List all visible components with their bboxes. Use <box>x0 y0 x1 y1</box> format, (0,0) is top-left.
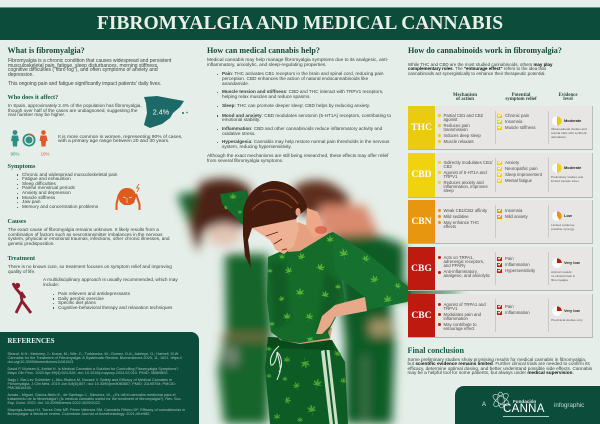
tag: THC: THC <box>411 122 432 133</box>
evidence: low: Limited evidence; <box>551 223 575 227</box>
column header: mechanism of action <box>453 92 477 102</box>
sleeve: right arm <box>333 232 412 310</box>
list: THC mechanisms <box>438 112 483 144</box>
text: multidisciplinary approach: A multidisciplinary approach is usually recommended, which may <box>43 277 178 282</box>
list: cannabis benefits: oxidative stress. <box>222 131 256 136</box>
evidence: very low: Animal models; <box>551 270 572 274</box>
tag: CBD: CBD <box>411 169 432 180</box>
text: conclusion: efficacy, determine optimal dosing, and better understand possible side effects. Cannabis <box>408 366 592 371</box>
text: reference list: Aznán-, Miguel, García-Nieto E., de Santiago J., Sánchez, M., ¿Es útil el cannabis medicinal para el <box>8 393 176 397</box>
list: CBN symptom relief <box>497 208 528 219</box>
list: CBD symptom relief: Anxiety <box>505 160 519 165</box>
list: symptoms: Anxiety and depression <box>22 190 71 195</box>
list: THC mechanisms: transmission <box>444 127 468 132</box>
text: CANNA: CANNA <box>503 403 545 415</box>
text: entourage effect: complementary roles. The "entourage effect" refers to the idea that <box>408 66 546 71</box>
text: reference list: PMC6616435. <box>8 386 32 390</box>
chart: 90/10 donut <box>23 134 35 146</box>
list: CBG symptom relief: Hypersensitivity <box>505 268 535 273</box>
list: THC mechanisms: Muscle relaxant <box>444 139 474 144</box>
text: benefits closing note: from several fibromyalgia symptoms. <box>207 158 283 163</box>
text: definition: Fibromyalgia is a chronic condition that causes widespread and persistent <box>8 58 171 64</box>
text: conclusion: but scientific evidence remains limited. Further clinical trials are needed to confirm its <box>408 361 590 366</box>
text: reference list: Esp. Dolor. 2022. doi: 10.20986/resed.2022.4029/2022. <box>8 401 101 405</box>
list: CBN symptom relief: Mild anxiety <box>505 214 528 219</box>
text: causes <box>8 227 170 246</box>
icon: person exercising <box>12 282 32 314</box>
list: CBD mechanisms: Reduces anxiety and <box>444 180 484 185</box>
arm skin <box>316 297 367 334</box>
text: prevalence in Spain: real number may be higher. <box>8 112 65 117</box>
heading: who does it affect: Who does it affect? <box>8 94 58 101</box>
list: CBN mechanisms: Mild sedative <box>444 214 469 219</box>
evidence: moderate: Moderate <box>564 165 581 170</box>
evidence: moderate: animal trials with synthetic <box>551 131 587 135</box>
list: cannabis benefits <box>217 71 391 149</box>
list: CBD mechanisms: CB2 <box>444 164 452 169</box>
tag: CBC: CBC <box>411 310 432 321</box>
text: reference list <box>8 352 185 416</box>
list: CBC mechanisms: Agonist of TRPA1 and <box>444 302 486 307</box>
text: reference list: fibromyalgia: a literature review. Colombian Journal of Anesthesiology. 2021;49:e982. <box>8 412 151 416</box>
list: cannabis benefits: Sleep: THC can promote deeper sleep; CBD helps by reducing anxiety. <box>222 103 370 108</box>
title: FIBROMYALGIA AND MEDICAL CANNABIS <box>97 13 503 34</box>
evidence: very low: no clinical trials in <box>551 274 575 278</box>
text: definition <box>8 58 172 78</box>
heading: references: REFERENCES <box>8 337 55 345</box>
sleeve: raised arm <box>220 190 250 226</box>
list: CBN symptom relief: Insomnia <box>505 208 522 213</box>
list: treatments: Daily aerobic exercise <box>58 296 104 301</box>
text: benefits closing note: Although the exact mechanisms are still being researched, these effects may offer relief <box>207 153 388 158</box>
column header: mechanism of action: Mechanism <box>453 93 477 98</box>
evidence: moderate <box>551 163 583 183</box>
card: THC <box>408 106 592 150</box>
list: symptoms: Muscle stiffness <box>22 195 55 200</box>
drawstrings <box>270 346 281 380</box>
evidence: moderate: limited sample sizes. <box>551 179 580 183</box>
list: CBD symptom relief: Neuropathic pain <box>505 166 538 171</box>
list: treatments <box>53 291 172 310</box>
text: infographic: infographic <box>554 402 584 408</box>
list: CBC mechanisms <box>438 302 486 331</box>
text: causes: combination of factors such as neurotransmitter imbalances in the nervous <box>8 232 163 237</box>
list: CBD mechanisms: sleep <box>444 188 454 193</box>
text: conclusion: may be a helpful tool for some patients, but always under medical supervision. <box>408 370 574 375</box>
icon: woman <box>11 130 19 146</box>
heading: what is fibromyalgia: What is fibromyalgia? <box>8 46 85 55</box>
text: definition: cognitive difficulties ("fibro fog"), and often symptoms of anxiety and <box>8 67 158 73</box>
list: CBG symptom relief: Pain <box>505 256 514 261</box>
face <box>252 219 299 254</box>
heading: how can medical cannabis help: How can medical cannabis help? <box>207 46 320 55</box>
heading: treatment: Treatment <box>8 255 35 262</box>
text: reference list: tratamiento de la fibromialgia? (Is medical cannabis useful for the treatment of fibromyalgia?). Rev. Soc. <box>8 397 182 401</box>
sharp figure <box>220 181 412 424</box>
list: symptoms <box>17 172 118 209</box>
footer panel: Fundación CANNA <box>455 386 600 424</box>
text: definition: musculoskeletal pain, fatigue, sleep disturbances, morning stiffness, <box>8 63 159 69</box>
heading: causes: Causes <box>8 218 26 225</box>
tag: CBN: CBN <box>411 216 432 227</box>
map: Spain with 2.4% <box>144 96 188 128</box>
list: CBN mechanisms <box>438 208 487 229</box>
list: THC symptom relief <box>497 113 536 130</box>
text: entourage effect: cannabinoids act synergistically to enhance their therapeutic potential. <box>408 71 546 76</box>
evidence: low: Low <box>564 213 572 218</box>
evidence: very low <box>551 306 583 322</box>
list: symptoms: Fatigue and exhaustion <box>22 176 71 181</box>
blurred ghost: right <box>293 180 460 424</box>
tag: CBG: CBG <box>411 263 432 274</box>
list: THC mechanisms: Partial CB1 and CB2 <box>444 112 483 118</box>
list: CBC mechanisms: TRPV1 <box>444 306 457 311</box>
text: multidisciplinary approach <box>43 277 178 287</box>
list: cannabis benefits: Hyperalgesia: Cannabis may help restore normal pain thresholds in the nervous <box>222 139 389 144</box>
heading: final conclusion: Final conclusion <box>408 346 464 354</box>
pants <box>265 337 348 424</box>
list: cannabis benefits: Pain: THC activates CB1 receptors in the brain and spinal cord, reducing pain <box>222 71 383 76</box>
heading: how do cannabinoids work: How do cannabinoids work in fibromyalgia? <box>408 46 562 55</box>
torso <box>267 232 345 343</box>
text: definition: depression. <box>8 72 34 78</box>
text: reference list: Strand, N.H.; Maloney, J.; Kraus, M.; Wie, C.; Turkiewicz, M.; Gomez, D.A.; Adeleye, O.; Harbell, M.W. <box>8 352 179 356</box>
panel: references <box>0 332 199 424</box>
torso shading <box>270 262 342 330</box>
text: reference list: Mayo Clin Proc. 2024 Apr;99(4):524-526. doi: 10.1016/j.mayocp.2024.02.010. PMID: 38569802. <box>8 371 169 375</box>
list: THC symptom relief: Chronic pain <box>505 113 529 118</box>
list: CBG symptom relief <box>497 256 536 273</box>
evidence: very low <box>551 258 580 282</box>
list: CBD mechanisms: inflammation, improves <box>444 184 488 189</box>
list: symptoms: Jaw pain <box>22 199 41 204</box>
text: daily impact: This ongoing pain and fatigue significantly impact patients' daily lives. <box>8 81 161 87</box>
underline <box>503 416 549 417</box>
tag: CBD <box>408 153 435 197</box>
chart: women and men share <box>10 130 50 156</box>
evidence: very low: Very low <box>564 260 580 265</box>
list: CBD symptom relief: Sleep improvement <box>505 172 542 177</box>
list: cannabis benefits: anandamide. <box>222 81 249 86</box>
card: CBN <box>408 200 592 244</box>
evidence: low: possible synergy. <box>551 227 575 231</box>
text: causes: system, physical or emotional traumas, infections, other chronic illnesses, and <box>8 236 170 241</box>
list: THC mechanisms: agonist <box>444 117 457 122</box>
text: Fundación: Fundación <box>513 399 536 404</box>
column header: potential symptom relief <box>505 92 537 102</box>
illustration: woman with neck and back pain <box>171 170 466 424</box>
evidence: moderate: Moderate <box>564 118 581 123</box>
text: reference list: Sagy I, Bar-Lev Schleider L, Abu-Shakra M, Novack V. Safety and Efficacy of Medical Cannabis in <box>8 378 172 382</box>
list: CBC mechanisms: May contribute to <box>444 322 476 327</box>
icon: man <box>40 130 48 146</box>
blurred ghost: left <box>177 179 272 424</box>
list: treatments: Specific diet plans <box>58 300 96 305</box>
evidence: moderate <box>551 116 587 139</box>
evidence: very low: Very low <box>564 308 580 313</box>
card: CBC <box>408 294 592 338</box>
text: intro to benefits <box>207 58 388 68</box>
text: causes: genetic predisposition. <box>8 241 55 246</box>
list: CBD mechanisms: Indirectly modulates CB1/ <box>444 160 492 164</box>
midriff skin <box>272 328 332 344</box>
list: CBD symptom relief: Mental fatigue <box>505 178 532 183</box>
list: THC symptom relief: Muscle stiffness <box>505 125 536 130</box>
list: CBC mechanisms: Modulates pain and <box>444 312 481 317</box>
list: CBG mechanisms: and PPARγ <box>444 263 465 268</box>
map: Spain with 2.4%: 2.4% <box>153 108 170 116</box>
column header: evidence level: level <box>563 97 573 102</box>
evidence: very low: fibromyalgia. <box>551 278 569 282</box>
text: intro to benefits: inflammatory, anxiolytic, and sleep-regulating properties. <box>207 63 327 68</box>
text: causes: The exact cause of fibromyalgia remains unknown. It likely results from a <box>8 227 159 232</box>
logo: Fundación CANNA <box>492 392 549 417</box>
list: cannabis benefits: system, reducing hypersensitivity. <box>222 144 292 149</box>
pants stripes <box>321 350 338 424</box>
evidence: low <box>551 211 575 231</box>
list: CBG mechanisms: Acts on TRPA1, <box>444 255 474 260</box>
text: conclusion <box>408 357 592 375</box>
list: cannabis benefits: emotional stability. <box>222 117 260 122</box>
list: CBG mechanisms: adrenergic receptors, <box>444 259 484 264</box>
text: reference list: David P, Mohsen A, Amital H. Is Medical Cannabis a Solution for Controlling Fibromyalgia Symptoms? <box>8 367 178 371</box>
text: entourage effect <box>408 62 552 76</box>
list: symptoms: Sleep difficulties <box>22 181 56 186</box>
text: entourage effect: While THC and CBD are the most studied cannabinoids, others may play <box>408 62 552 67</box>
column header: mechanism of action: of action <box>456 97 474 102</box>
text: women and age range: with a primary age range between 20 and 30 years. <box>58 139 169 144</box>
label: 90 percent: 90% <box>11 152 19 156</box>
tag: THC <box>408 106 435 149</box>
card: CBG <box>408 247 592 291</box>
header banner <box>0 7 600 40</box>
text: treatment intro: There is no known cure, so treatment focuses on symptom relief and improving <box>8 264 172 269</box>
list: symptoms: Chronic and widespread musculoskeletal pain <box>22 172 117 177</box>
list: cannabis benefits: Inflammation: CBD and other cannabinoids reduce inflammatory activity and <box>222 126 382 131</box>
list: cannabis benefits: Muscle tension and stiffness: CBD and THC interact with TRPV1 receptors, <box>222 89 383 94</box>
list: CBG symptom relief: Inflammation <box>505 262 530 267</box>
icon: head in pain <box>116 184 140 210</box>
text: reference list: Mayorga-Anaya HJ, Torres Ortiz MP, Pérez Valencia SM. Cannabis Ribero DF. Efficacy of cannabinoids in <box>8 408 185 412</box>
text: A: A <box>482 402 486 408</box>
list: CBG mechanisms: analgesic, and anxiolytic <box>444 273 490 278</box>
list: CBC symptom relief: Inflammation <box>505 310 530 315</box>
cannabis leaf pattern <box>222 193 403 344</box>
list: CBD mechanisms: TRPV1 <box>444 174 457 179</box>
list: CBD symptom relief <box>497 160 542 183</box>
list: cannabis benefits: Mood and anxiety: CBD modulates serotonin (5-HT1A) receptors, contributing to <box>222 113 391 118</box>
evidence: moderate: Preliminary studies and <box>551 174 583 178</box>
list: symptoms: Memory and concentration problems <box>22 204 98 209</box>
icon: atom <box>492 392 510 408</box>
tag: CBG <box>408 247 435 290</box>
list: CBN mechanisms: May enhance THC <box>444 220 479 225</box>
column header: evidence level <box>558 92 578 102</box>
text: reference list: Cannabis for the Treatment of Fibromyalgia: A Systematic Review. Biomedicines 2023, 11, 1621. https:// <box>8 356 182 360</box>
list: CBG mechanisms <box>438 255 490 278</box>
list: CBC mechanisms: inflammation <box>444 316 468 321</box>
list: cannabis benefits: helping relax muscles and reduce spasms. <box>222 94 311 99</box>
list: cannabis benefits: perception. CBD enhances the action of natural endocannabinoids like <box>222 76 368 81</box>
list: treatments: Cognitive-behavioral therapy and relaxation techniques <box>58 305 172 310</box>
list: CBD mechanisms: Agonist of 5-HT1A and <box>444 170 487 174</box>
column header: potential symptom relief: symptom relief <box>505 97 537 102</box>
text: treatment intro <box>8 264 172 274</box>
text: women and age range: It is more common in women, representing 90% of cases, <box>58 135 182 140</box>
card: CBD <box>408 153 592 198</box>
text: women and age range <box>58 134 182 144</box>
list: THC mechanisms: Induces deep sleep <box>444 133 481 138</box>
text: prevalence in Spain: though over half of the cases are undiagnosed, suggesting the <box>8 108 138 113</box>
evidence: moderate: derivatives. <box>551 135 567 139</box>
label: 10 percent: 10% <box>41 152 49 156</box>
text: reference list: Fibromyalgia. J Clin Med. 2019 Jun 5;8(6):807. doi: 10.3390/jcm8060807. PMID: 31195754; PMCID: <box>8 382 176 386</box>
tag: CBN <box>408 200 435 243</box>
evidence: very low: Preclinical studies only. <box>551 318 583 322</box>
list: THC mechanisms: Reduces pain <box>444 122 470 128</box>
list: symptoms: Painful menstrual periods <box>22 185 75 190</box>
text: intro to benefits: Medical cannabis may help manage fibromyalgia symptoms due to its analgesic, anti- <box>207 58 388 63</box>
text: multidisciplinary approach: include: <box>43 282 59 287</box>
list: CBG mechanisms: Anti-inflammatory, <box>444 269 478 274</box>
list: THC symptom relief: Insomnia <box>505 119 522 124</box>
column header: potential symptom relief: Potential <box>512 93 530 98</box>
column header: evidence level: Evidence <box>558 93 578 98</box>
hair <box>243 181 307 268</box>
text: prevalence in Spain <box>8 103 142 117</box>
list: CBC mechanisms: entourage effect <box>444 326 474 331</box>
tag: CBC <box>408 294 435 337</box>
heading: symptoms: Symptoms <box>8 162 35 170</box>
text: treatment intro: quality of life. <box>8 269 35 274</box>
list: CBN mechanisms: Weak CB1/CB2 affinity <box>444 208 487 212</box>
text: conclusion: Some preliminary studies show promising results for medical cannabis in fibromyalgia, <box>408 357 586 362</box>
list: CBN mechanisms: effects <box>444 224 456 229</box>
text: prevalence in Spain: In Spain, approximately 2.4% of the population has fibromyalgia, <box>8 103 142 108</box>
list: CBD mechanisms <box>438 160 492 193</box>
evidence: moderate: Observational studies and <box>551 127 587 131</box>
list: CBC symptom relief <box>497 304 530 315</box>
text: benefits closing note <box>207 153 388 163</box>
list: treatments: Pain relievers and antidepressants <box>58 291 130 296</box>
text: reference list: doi.org/10.3390/biomedicines11061621 <box>8 360 74 364</box>
list: CBC symptom relief: Pain <box>505 304 514 309</box>
neck and hand <box>288 222 328 252</box>
